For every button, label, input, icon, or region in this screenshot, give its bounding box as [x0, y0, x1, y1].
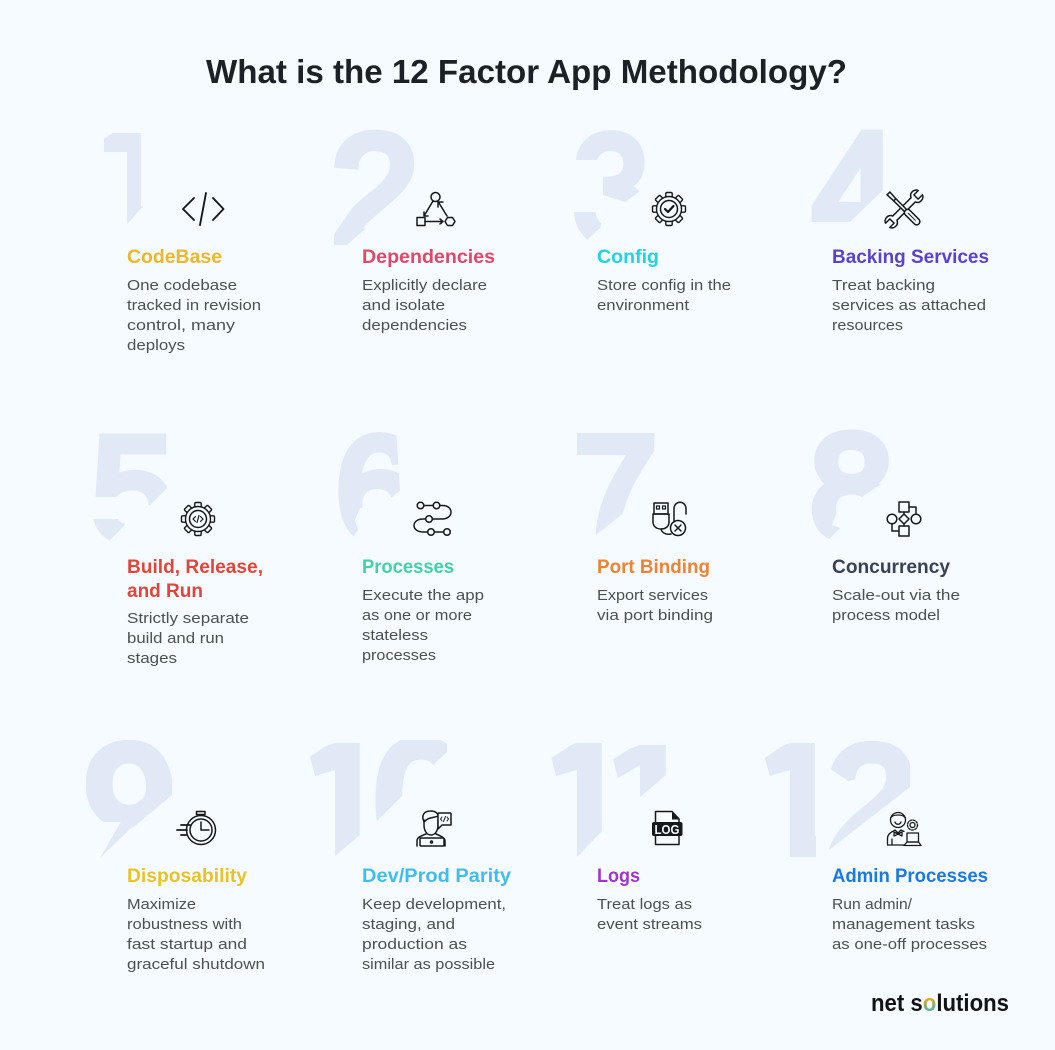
numeral 12: 1	[751, 712, 840, 891]
numeral 11	[552, 743, 666, 857]
description	[597, 587, 713, 624]
description: dependencies	[362, 317, 467, 334]
description: Explicitly declare	[362, 277, 487, 294]
icon: gear with check	[652, 192, 686, 226]
heading: Logs	[597, 865, 640, 887]
description: tracked in revision	[127, 297, 261, 314]
numeral 7: 7	[575, 407, 656, 570]
panel: factor 9 Disposability	[86, 740, 264, 972]
description	[362, 587, 484, 664]
description: production as	[362, 936, 467, 953]
description: processes	[362, 647, 436, 664]
heading: Processes	[362, 556, 454, 578]
icon: dependency triangle	[417, 192, 455, 226]
description: environment	[597, 297, 690, 314]
icon: developer with laptop	[417, 811, 451, 846]
description: resources	[832, 317, 903, 334]
description: as one-off processes	[832, 936, 987, 953]
description: as one or more	[362, 607, 472, 624]
heading: Dev/Prod Parity	[362, 865, 511, 887]
heading: Port Binding	[597, 556, 710, 578]
description: Store config in the	[597, 277, 731, 294]
icon: crossed tools	[883, 188, 925, 230]
description	[362, 896, 506, 973]
description: similar as possible	[362, 956, 495, 973]
description: graceful shutdown	[127, 956, 265, 973]
icon: process flow	[414, 502, 451, 535]
description: services as attached	[832, 297, 986, 314]
description	[597, 896, 702, 933]
description: stateless	[362, 627, 428, 644]
icon: gear with code	[182, 502, 214, 536]
heading: Dependencies	[362, 246, 495, 268]
description: Strictly separate	[127, 610, 249, 627]
heading	[127, 556, 263, 602]
logo: net solutions: net solutions	[871, 990, 1009, 1017]
description: stages	[127, 650, 177, 667]
icon: stopwatch	[177, 812, 216, 844]
description	[597, 277, 731, 314]
icon: flowchart	[887, 502, 921, 536]
panel: factor 7 Port Binding	[577, 433, 712, 623]
description	[127, 277, 261, 354]
numeral 5: 5	[92, 407, 173, 570]
heading: Build, Release,	[127, 556, 263, 578]
icon: code brackets	[183, 193, 224, 225]
description: Treat backing	[832, 277, 935, 294]
numeral 8: 8	[811, 405, 892, 568]
numeral 10	[310, 740, 447, 856]
panel: factor 4 Backing Services	[812, 130, 988, 330]
panel: factor 5 Build, Release, and Run	[94, 434, 262, 666]
description: event streams	[597, 916, 702, 933]
description: Execute the app	[362, 587, 484, 604]
description: Export services	[597, 587, 708, 604]
panel: factor 11 Logs	[552, 743, 702, 929]
description	[127, 896, 265, 973]
panel: factor 1 CodeBase	[104, 133, 260, 353]
panel: factor 12 Admin Processes	[764, 740, 988, 952]
numeral 1: 1	[88, 105, 161, 252]
panel: factor 10 Dev/Prod Parity	[310, 740, 511, 972]
heading: Concurrency	[832, 556, 950, 578]
numeral 6: 6	[336, 407, 417, 570]
panel: factor 3 Config	[574, 130, 730, 310]
heading: Disposability	[127, 865, 247, 887]
icon: log file	[652, 811, 682, 844]
heading: Backing Services	[832, 246, 989, 268]
description	[127, 610, 249, 667]
description: Run admin/	[832, 896, 913, 913]
numeral 10: 1	[296, 711, 385, 890]
numeral 9	[86, 740, 172, 858]
numeral 12	[764, 740, 910, 857]
panel: factor 8 Concurrency	[812, 430, 960, 623]
title: What is the 12 Factor App Methodology?	[206, 54, 847, 91]
description: One codebase	[127, 277, 237, 294]
description	[362, 277, 487, 334]
description: and isolate	[362, 297, 445, 314]
heading: Admin Processes	[832, 865, 988, 887]
heading: Config	[597, 246, 659, 268]
description: control, many	[127, 317, 236, 334]
heading: and Run	[127, 580, 203, 602]
description: Scale-out via the	[832, 587, 960, 604]
description: Keep development,	[362, 896, 506, 913]
description: Maximize	[127, 896, 196, 913]
description: robustness with	[127, 916, 242, 933]
heading: CodeBase	[127, 246, 222, 268]
description: process model	[832, 607, 940, 624]
icon: log file: LOG	[654, 823, 680, 837]
description	[832, 896, 987, 953]
panel: factor 2 Dependencies	[334, 130, 494, 333]
description: management tasks	[832, 916, 975, 933]
numeral 4: 4	[813, 102, 897, 276]
numeral 12: 2	[827, 713, 916, 892]
numeral 9: 9	[84, 712, 176, 896]
description: deploys	[127, 337, 185, 354]
description	[832, 587, 960, 624]
numeral 11: 1	[602, 712, 691, 891]
description	[832, 277, 986, 334]
icon: usb with cross	[653, 502, 686, 536]
numeral 3: 3	[574, 104, 648, 272]
panel: factor 6 Processes	[338, 432, 484, 663]
description: Treat logs as	[597, 896, 692, 913]
description: fast startup and	[127, 936, 247, 953]
description: build and run	[127, 630, 224, 647]
numeral 11: 1	[538, 712, 627, 891]
numeral 10: 0	[375, 708, 467, 892]
description: via port binding	[597, 607, 713, 624]
icon: admin with gear	[888, 812, 921, 846]
description: staging, and	[362, 916, 455, 933]
numeral 2: 2	[331, 103, 419, 279]
